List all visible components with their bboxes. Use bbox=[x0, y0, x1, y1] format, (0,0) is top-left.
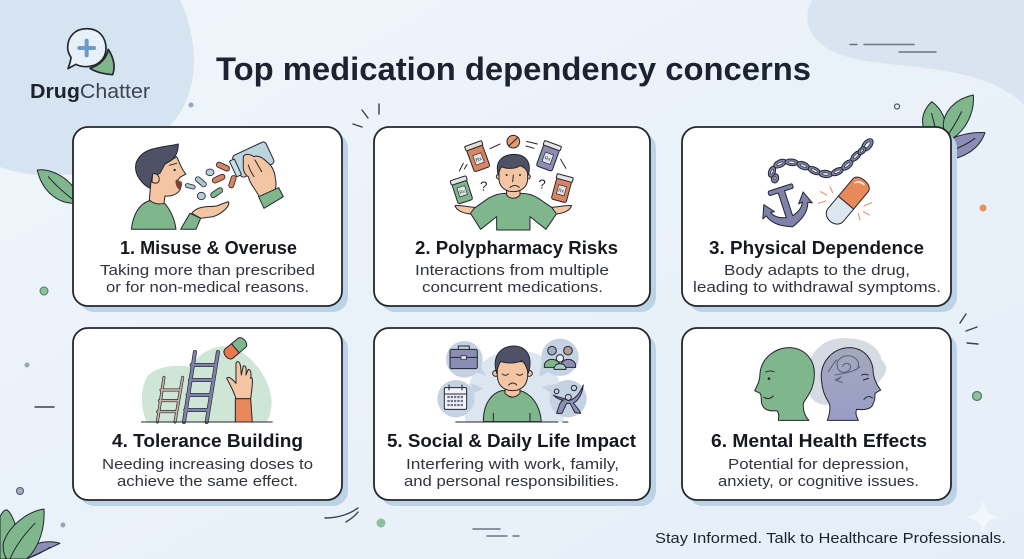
description bbox=[102, 456, 313, 490]
description: or for non-medical reasons. bbox=[106, 279, 309, 296]
panel: tolerance building bbox=[73, 328, 348, 506]
description bbox=[415, 262, 609, 296]
illustration: ladders, reaching hand and capsule bbox=[141, 336, 273, 422]
heading: 3. Physical Dependence bbox=[709, 237, 924, 258]
description: Interfering with work, family, bbox=[406, 456, 619, 473]
bottle: green: Rx bbox=[459, 188, 466, 195]
heading: 5. Social & Daily Life Impact bbox=[387, 430, 636, 451]
card background bbox=[73, 127, 348, 312]
illustration: anchor chain and capsule bbox=[755, 137, 875, 235]
bottle: orange right: Rx bbox=[558, 188, 565, 194]
illustration: person taking too many pills bbox=[131, 141, 283, 229]
description: anxiety, or cognitive issues. bbox=[718, 473, 919, 490]
panel: social and daily life impact bbox=[374, 328, 656, 506]
illustration: person juggling pill bottles: ? bbox=[480, 179, 487, 194]
background blob: top left bbox=[0, 0, 194, 175]
illustration: two heads with cloud and spiral bbox=[755, 338, 886, 420]
background blob: top right bbox=[807, 0, 1024, 105]
description: Body adapts to the drug, bbox=[724, 262, 910, 279]
capsule bbox=[823, 174, 872, 228]
card background bbox=[682, 127, 957, 312]
description: concurrent medications. bbox=[422, 279, 603, 296]
title: Top medication dependency concerns bbox=[216, 51, 811, 87]
heading: 1. Misuse & Overuse bbox=[120, 237, 297, 258]
icon: chat bubbles with plus bbox=[68, 29, 114, 75]
leaves: top right bbox=[923, 95, 985, 159]
description bbox=[693, 262, 941, 296]
description: Interactions from multiple bbox=[415, 262, 609, 279]
chain links bbox=[767, 137, 875, 184]
card background bbox=[374, 127, 656, 312]
anchor bbox=[755, 179, 817, 235]
heading: 2. Polypharmacy Risks bbox=[415, 237, 618, 258]
logo wordmark: DrugChatter bbox=[30, 80, 150, 103]
description: and personal responsibilities. bbox=[404, 473, 619, 490]
description bbox=[404, 456, 619, 490]
logo bbox=[30, 29, 150, 103]
description: achieve the same effect. bbox=[117, 473, 298, 490]
description: Needing increasing doses to bbox=[102, 456, 313, 473]
footer note: Stay Informed. Talk to Healthcare Professionals. bbox=[655, 530, 1006, 547]
description bbox=[100, 262, 315, 296]
leaves: bottom left bbox=[0, 509, 60, 559]
leaf: left of card 1 bbox=[37, 170, 74, 203]
panel: physical dependence bbox=[682, 127, 957, 312]
card background bbox=[73, 328, 348, 506]
card background bbox=[374, 328, 656, 506]
bottle: orange: Rx bbox=[475, 156, 483, 164]
panel: mental health effects bbox=[682, 328, 957, 506]
description: Taking more than prescribed bbox=[100, 262, 315, 279]
card background bbox=[682, 328, 957, 506]
bottle: purple: Rx bbox=[544, 155, 552, 163]
illustration: person juggling pill bottles bbox=[450, 135, 573, 230]
illustration: sad person with work, family and calendar bubbles bbox=[437, 339, 587, 422]
heading: 6. Mental Health Effects bbox=[711, 430, 927, 451]
description: Potential for depression, bbox=[728, 456, 909, 473]
heading: 4. Tolerance Building bbox=[112, 430, 303, 451]
description bbox=[718, 456, 919, 490]
description: leading to withdrawal symptoms. bbox=[693, 279, 941, 296]
panel: misuse and overuse bbox=[73, 127, 348, 312]
panel: polypharmacy risks bbox=[374, 127, 656, 312]
illustration: person juggling pill bottles: ? bbox=[538, 177, 546, 192]
